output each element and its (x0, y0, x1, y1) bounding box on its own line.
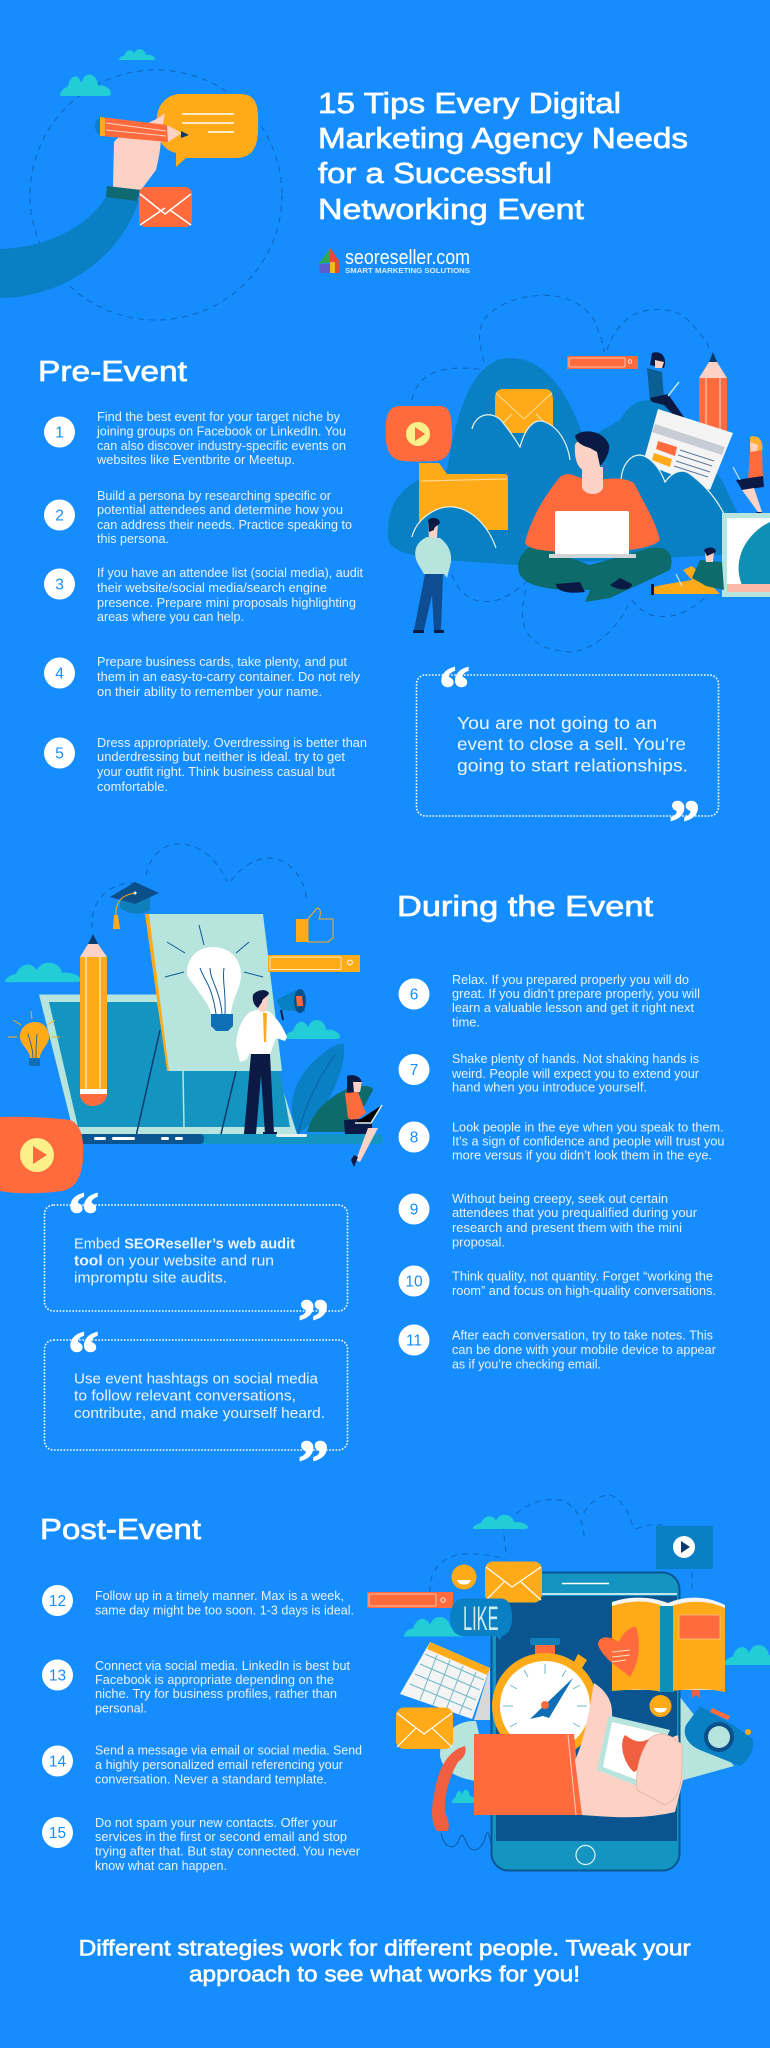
quote text: contribute, and make yourself heard. (74, 1405, 325, 1422)
tip 1: joining groups on Facebook or LinkedIn. You (96, 424, 346, 438)
closing message (79, 1936, 691, 1986)
tip 9: attendees that you prequalified during your (452, 1205, 698, 1220)
tip 1: can also discover industry-specific events on (97, 438, 346, 453)
tip 3: If you have an attendee list (social media), audit (97, 565, 363, 580)
tip 14 (42, 1742, 362, 1786)
icon: small lightbulb (8, 1011, 60, 1066)
tip 5: comfortable. (97, 779, 168, 794)
title: for a Successful (318, 158, 552, 190)
heading: During the Event: During the Event (397, 891, 653, 923)
tip 15: trying after that. But stay connected. You never (95, 1844, 361, 1858)
hill arcs (472, 415, 570, 480)
tip 12: same day might be too soon. 1-3 days is ideal. (95, 1602, 354, 1618)
tip 7: weird. People will expect you to extend your (451, 1066, 700, 1081)
tip 10: Think quality, not quantity. Forget “working the (452, 1268, 713, 1284)
closing message: approach to see what works for you! (189, 1962, 580, 1986)
heading: Post-Event: Post-Event (40, 1514, 201, 1546)
phone (492, 1572, 680, 1870)
icon: telephone handset (432, 1746, 466, 1831)
tip 7: hand when you introduce yourself. (452, 1080, 647, 1094)
tip 10: 10 (405, 1274, 423, 1290)
icon: search bar (567, 356, 638, 369)
tip 7 (398, 1051, 700, 1094)
fingers (636, 1734, 682, 1805)
tip 14: conversation. Never a standard template. (95, 1772, 327, 1786)
mint backdrop (440, 1697, 734, 1782)
presenter with megaphone (236, 989, 306, 1135)
post-event illustration: phone and hand (367, 1495, 770, 1870)
quote text: You are not going to an (457, 713, 657, 733)
hero illustration: hand with pencil (0, 49, 282, 320)
opening quote mark: “ (68, 1320, 99, 1388)
tip 11: 11 (406, 1332, 422, 1350)
tip 4: Prepare business cards, take plenty, and put (97, 654, 347, 669)
tip 15: 15 (49, 1825, 66, 1842)
shirt (525, 474, 660, 552)
tip 4: on their ability to remember your name. (97, 684, 322, 699)
tip 14: 14 (49, 1754, 66, 1770)
tip 8: more versus if you didn’t look them in the eye. (452, 1148, 712, 1162)
icon: cloud left (5, 963, 81, 982)
closing quote mark: ” (298, 1429, 329, 1497)
tip 5: your outfit right. Think business casual but (97, 764, 335, 779)
tip 12: 12 (49, 1593, 66, 1610)
quote text: Embed SEOReseller’s web audit (74, 1236, 295, 1252)
hand holding card (575, 1683, 683, 1817)
icon: emoji right (650, 1695, 672, 1717)
tip 1: websites like Eventbrite or Meetup. (96, 452, 295, 467)
icon: folder (419, 463, 508, 530)
head (575, 440, 603, 472)
picture frame with plant (722, 513, 770, 597)
pre-event illustration: man with laptop (386, 295, 770, 652)
tip 5: underdressing but neither is ideal. try to get (97, 749, 345, 764)
tip 9 (398, 1191, 698, 1250)
icon: like bubble (450, 1598, 512, 1640)
icon: video box (656, 1526, 713, 1569)
tip 4: them in an easy-to-carry container. Do not rely (97, 669, 360, 684)
closing quote mark: ” (669, 789, 700, 857)
icon: cloud left (404, 1617, 466, 1636)
tip 15: services in the first or second email and stop (95, 1829, 347, 1844)
seated woman (344, 1075, 382, 1167)
watch band (106, 186, 141, 201)
tip 8 (398, 1120, 724, 1162)
icon: large cloud (60, 74, 111, 96)
logo: seoreseller.com: seoreseller.com (345, 247, 470, 269)
title: Networking Event (318, 194, 584, 226)
tip 3: areas where you can help. (97, 609, 244, 624)
hand (113, 113, 165, 190)
legs (518, 545, 672, 602)
icon: search bar (367, 1592, 453, 1608)
tip 13: Connect via social media. LinkedIn is best but (95, 1658, 350, 1673)
icon: small cloud low (452, 1790, 476, 1803)
tip 8: It’s a sign of confidence and people will trust you (452, 1134, 724, 1148)
tip 13 (42, 1658, 350, 1716)
laptop screen (39, 994, 297, 1134)
quote text: impromptu site audits. (74, 1270, 227, 1286)
title: Marketing Agency Needs (318, 123, 688, 155)
hump over card (621, 455, 727, 545)
icon: video play (386, 406, 452, 462)
tip 3 (44, 565, 363, 624)
tip 6: learn a valuable lesson and get it right next (452, 1000, 694, 1015)
quote box: event hashtags (44, 1320, 348, 1497)
tip 13: personal. (95, 1700, 147, 1716)
tip 5: 5 (55, 746, 64, 762)
title: 15 Tips Every Digital (318, 88, 621, 120)
woman on hill (647, 352, 686, 422)
icon: like bubble: LIKE (463, 1600, 498, 1638)
quote text: event to close a sell. You’re (457, 734, 686, 754)
logo: seoreseller.com: SMART MARKETING SOLUTIONS (345, 268, 470, 275)
tip 11 (398, 1324, 717, 1372)
tip 14: a highly personalized email referencing your (95, 1757, 344, 1772)
tip 5 (44, 735, 367, 794)
tip 6: 6 (410, 986, 418, 1004)
laptop (555, 511, 629, 555)
background hills (388, 358, 760, 565)
tip 13: Facebook is appropriate depending on the (95, 1672, 334, 1687)
logo: seoreseller.com (319, 247, 470, 275)
tip 6 (398, 972, 700, 1030)
icon: search bar (268, 955, 360, 972)
whiteboard (136, 914, 282, 1134)
quote box: relationships (416, 655, 718, 857)
seated man with laptop (518, 431, 672, 602)
tip 1: Find the best event for your target niche by (97, 409, 340, 424)
arm sleeve (0, 195, 139, 298)
icon: video play (0, 1117, 83, 1193)
icon: emoji top (452, 1564, 476, 1590)
sleeve cuff line (568, 1735, 576, 1815)
quote text (457, 713, 688, 776)
icon: thumbs up (296, 908, 333, 942)
tip 12 (42, 1585, 354, 1618)
quote text: going to start relationships. (457, 756, 688, 776)
tip 11: can be done with your mobile device to appear (452, 1342, 717, 1357)
tip 8: Look people in the eye when you speak to them. (452, 1120, 724, 1134)
tip 8: 8 (410, 1130, 418, 1146)
tip 2 (44, 488, 352, 546)
closing message: Different strategies work for different people. Tweak your (79, 1936, 691, 1960)
quote box: web audit tool (44, 1181, 348, 1356)
icon: plant (292, 1044, 373, 1134)
sitting man with laptop (651, 548, 724, 595)
icon: camera (685, 1706, 753, 1766)
tip 2: can address their needs. Practice speaking to (97, 517, 352, 532)
opening quote mark: “ (68, 1181, 99, 1249)
icon: envelope (139, 187, 192, 227)
icon: calendar (400, 1642, 490, 1720)
tip 4 (44, 654, 360, 699)
during-event illustration: presentation on laptop (0, 844, 383, 1193)
icon: graduation cap (110, 882, 159, 929)
icon: open book with heart (598, 1598, 725, 1698)
tip 13: niche. Try for business profiles, rather than (95, 1686, 337, 1701)
tip 9: Without being creepy, seek out certain (452, 1191, 668, 1206)
icon: speech bubble (157, 94, 258, 167)
hump over folder (412, 507, 496, 548)
quote text (74, 1370, 325, 1422)
icon: pencil (80, 934, 107, 1106)
icon: envelope on hill (495, 389, 553, 433)
photo card (597, 1716, 670, 1788)
tip 12: Follow up in a timely manner. Max is a week, (95, 1588, 344, 1603)
quote text: tool on your website and run (74, 1252, 274, 1270)
tip 6: time. (452, 1014, 480, 1030)
icon: small cloud (119, 49, 155, 60)
tip 2: potential attendees and determine how you (97, 502, 343, 517)
tip 6: great. If you didn’t prepare properly, you will (452, 986, 700, 1001)
tip 11: After each conversation, try to take notes. This (452, 1328, 713, 1342)
title (318, 88, 688, 226)
tip 5: Dress appropriately. Overdressing is better than (97, 735, 367, 750)
quote text: to follow relevant conversations, (74, 1388, 296, 1404)
tip 10: room” and focus on high-quality conversations. (452, 1283, 716, 1298)
tip 9: 9 (410, 1202, 418, 1218)
tip 2: Build a persona by researching specific or (97, 488, 332, 503)
tip 2: this persona. (97, 531, 169, 546)
tip 10 (398, 1266, 716, 1298)
opening quote mark: “ (439, 655, 470, 723)
tip 13: 13 (49, 1668, 66, 1684)
tip 15: Do not spam your new contacts. Offer your (95, 1815, 338, 1830)
tip 3: 3 (55, 576, 64, 594)
icon: envelope left (396, 1708, 453, 1749)
tip 11: as if you’re checking email. (452, 1356, 601, 1372)
icon: envelope top (485, 1562, 542, 1602)
standing man (413, 518, 451, 633)
pencil (95, 117, 189, 142)
tip 3: presence. Prepare mini proposals highlighting (97, 595, 356, 610)
tip 2: 2 (55, 508, 64, 524)
icon: stopwatch (492, 1638, 598, 1759)
heading: Pre-Event: Pre-Event (38, 356, 187, 388)
quote text: Use event hashtags on social media (74, 1370, 319, 1388)
woman on right with laptop (733, 436, 764, 515)
tip 15 (42, 1815, 361, 1873)
orange sleeve (474, 1734, 582, 1815)
tip 6: Relax. If you prepared properly you will do (452, 972, 689, 987)
icon: cloud top (473, 1515, 528, 1529)
closing quote mark: ” (298, 1288, 329, 1356)
tip 1: 1 (55, 424, 64, 442)
tip 15: know what can happen. (95, 1858, 227, 1873)
tip 9: proposal. (452, 1234, 505, 1250)
tip 3: their website/social media/search engine (97, 580, 327, 595)
browser window card (643, 409, 733, 490)
icon: lightbulb (165, 925, 263, 1031)
icon: pencil (699, 352, 727, 438)
quote text (74, 1236, 295, 1286)
tip 4: 4 (55, 666, 64, 682)
tip 7: Shake plenty of hands. Not shaking hands is (452, 1051, 699, 1066)
tip 9: research and present them with the mini (452, 1220, 682, 1235)
hair (575, 431, 609, 466)
neck (582, 467, 603, 494)
tip 1 (44, 409, 346, 467)
tip 14: Send a message via email or social media. Send (95, 1742, 362, 1758)
desk bar (70, 1134, 383, 1144)
phone cord (441, 1833, 491, 1850)
icon: cloud right (724, 1645, 770, 1665)
icon: small cloud (285, 1020, 340, 1039)
tip 7: 7 (410, 1062, 418, 1079)
